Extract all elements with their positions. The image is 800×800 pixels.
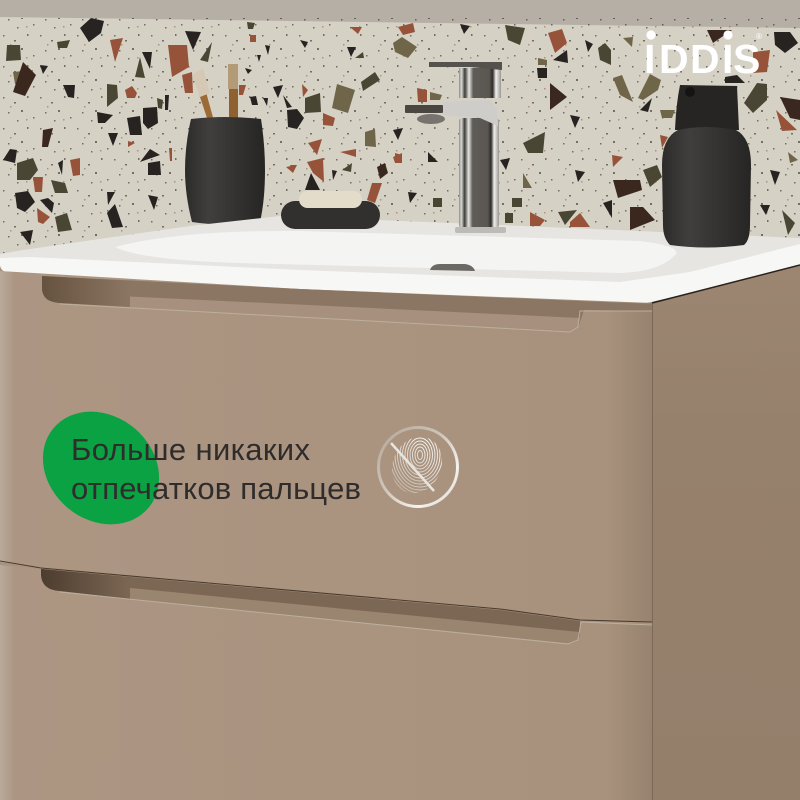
basin drain bbox=[430, 264, 475, 271]
green blob accent bbox=[20, 388, 182, 548]
cabinet side panel bbox=[652, 265, 800, 800]
terrazzo tile wall bbox=[0, 17, 800, 270]
soap dispenser bbox=[662, 85, 751, 248]
panel edge line and sink shadow bbox=[652, 265, 800, 800]
sink basin bbox=[0, 216, 800, 303]
sink front rim bbox=[0, 244, 800, 303]
headline text bbox=[71, 432, 361, 506]
lower drawer front bbox=[0, 561, 652, 800]
chrome faucet bbox=[405, 62, 506, 233]
concrete upper wall bbox=[0, 0, 800, 32]
drawer gap bbox=[0, 561, 652, 622]
tumbler cup bbox=[185, 117, 265, 224]
icon: crossed-out fingerprint bbox=[378, 414, 458, 506]
handle recess: lower bbox=[41, 569, 652, 644]
headline text: отпечатков пальцев bbox=[71, 471, 361, 506]
logo: iDDiS: IDDIS bbox=[644, 36, 760, 82]
handle recess: upper bbox=[42, 276, 652, 332]
logo: iDDiS: ® bbox=[756, 32, 762, 41]
soap dish with soap bbox=[281, 191, 380, 229]
upper drawer front bbox=[0, 271, 652, 622]
headline text: Больше никаких bbox=[71, 432, 310, 467]
basin interior bbox=[115, 231, 676, 273]
toothbrushes bbox=[192, 64, 238, 121]
